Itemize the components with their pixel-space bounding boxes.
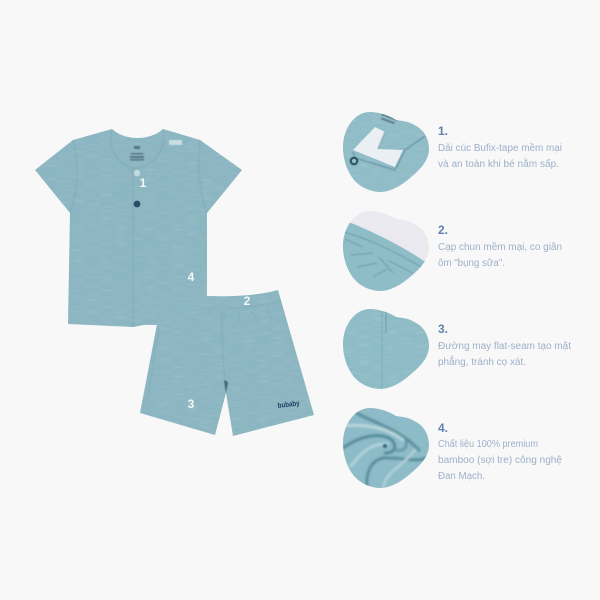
- garment number 2: 2: [244, 294, 251, 308]
- feature 3 text: [438, 322, 571, 368]
- feature 4 text: bamboo (sợi tre) công nghệ: [438, 455, 562, 466]
- shoulder tape: [169, 140, 182, 145]
- garment number 4: 4: [188, 270, 195, 284]
- feature 1 text: [438, 124, 562, 170]
- feature 1 text: 1.: [438, 124, 448, 138]
- light button: [134, 170, 140, 176]
- heart detail 2: waistband: [343, 211, 433, 293]
- label: bubaby logo on shorts: bubaby: [277, 398, 301, 410]
- feature 2 text: [438, 223, 562, 269]
- feature 1 text: Dải cúc Bufix-tape mềm mại: [438, 142, 562, 154]
- garment number 1: 1: [140, 176, 147, 190]
- feature 3 text: Đường may flat-seam tạo mặt: [438, 341, 571, 352]
- heart detail 4: fabric swirl: [343, 408, 433, 490]
- feature 3 text: phẳng, tránh cọ xát.: [438, 355, 526, 368]
- shorts: [140, 290, 314, 436]
- feature 4 text: Đan Mạch.: [438, 471, 485, 482]
- feature 4 text: [438, 421, 562, 482]
- neck label: [130, 146, 144, 160]
- shirt: [30, 125, 245, 330]
- heart detail 1: button tape: [343, 112, 433, 194]
- feature 4 text: Chất liệu 100% premium: [438, 438, 538, 450]
- feature 3 text: 3.: [438, 322, 448, 336]
- dark button: [134, 201, 140, 207]
- feature 2 text: Cạp chun mềm mại, co giãn: [438, 241, 562, 253]
- heart detail 3: flat seam: [343, 309, 433, 391]
- feature 4 text: 4.: [438, 421, 448, 435]
- garment number 3: 3: [188, 397, 195, 411]
- feature 2 text: ôm "bụng sữa".: [438, 258, 505, 269]
- feature 2 text: 2.: [438, 223, 448, 237]
- feature 1 text: và an toàn khi bé nằm sấp.: [438, 157, 559, 170]
